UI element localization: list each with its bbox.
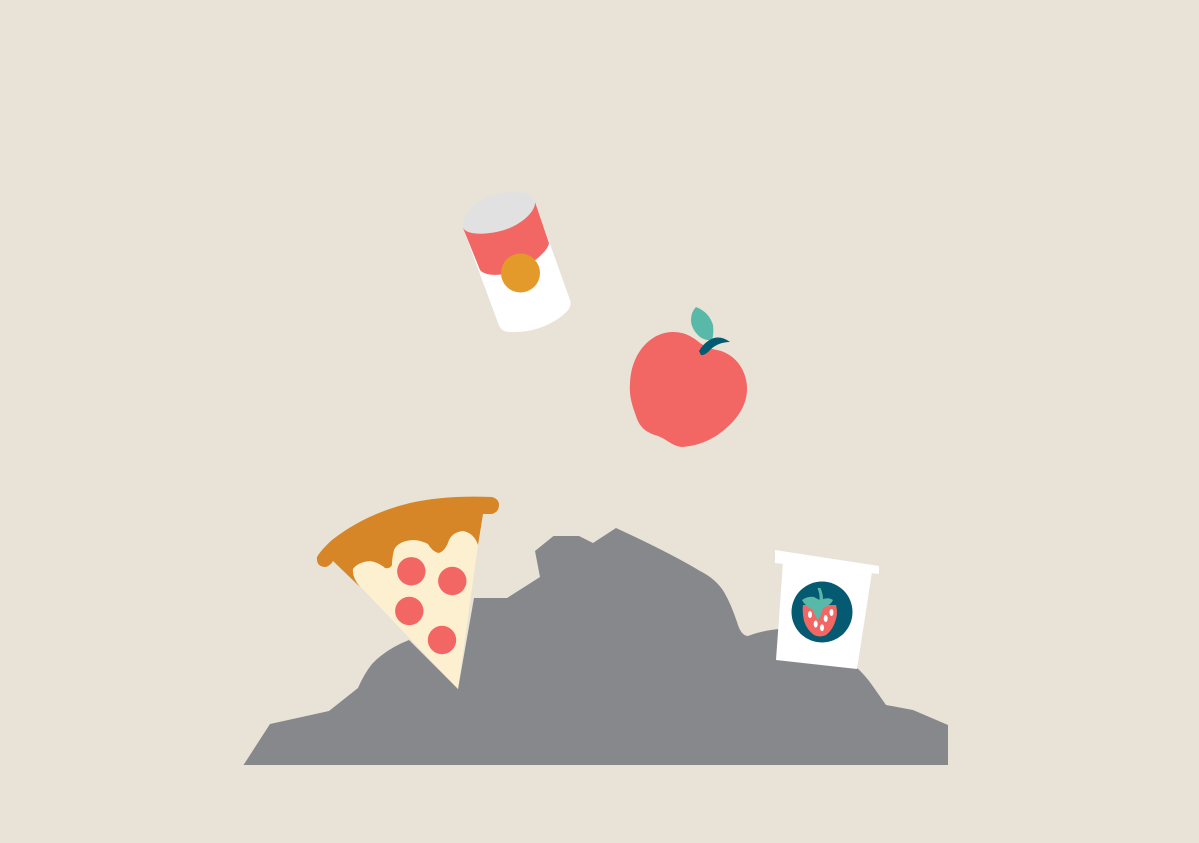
icon: pizza slice — [317, 497, 499, 689]
cup body — [776, 562, 872, 669]
pepperoni — [428, 626, 456, 654]
icon: soup can — [463, 192, 571, 332]
can lid — [463, 192, 535, 234]
pepperoni — [397, 557, 425, 586]
cup lid — [775, 550, 879, 574]
icon: apple — [630, 307, 747, 447]
strawberry — [803, 605, 837, 636]
can logo — [501, 254, 540, 292]
apple stem — [699, 338, 730, 355]
strawberry seeds — [808, 609, 834, 631]
icon: yogurt cup — [775, 550, 879, 669]
can body — [463, 202, 571, 332]
pepperoni — [438, 567, 466, 595]
pizza cheese — [335, 510, 483, 689]
pepperoni — [395, 597, 423, 625]
pizza crust — [317, 497, 499, 587]
apple body — [630, 332, 747, 447]
landfill mound — [244, 528, 948, 765]
can label — [463, 202, 549, 275]
strawberry leaves — [802, 588, 833, 620]
apple leaf — [691, 307, 713, 340]
cup badge — [792, 582, 852, 642]
